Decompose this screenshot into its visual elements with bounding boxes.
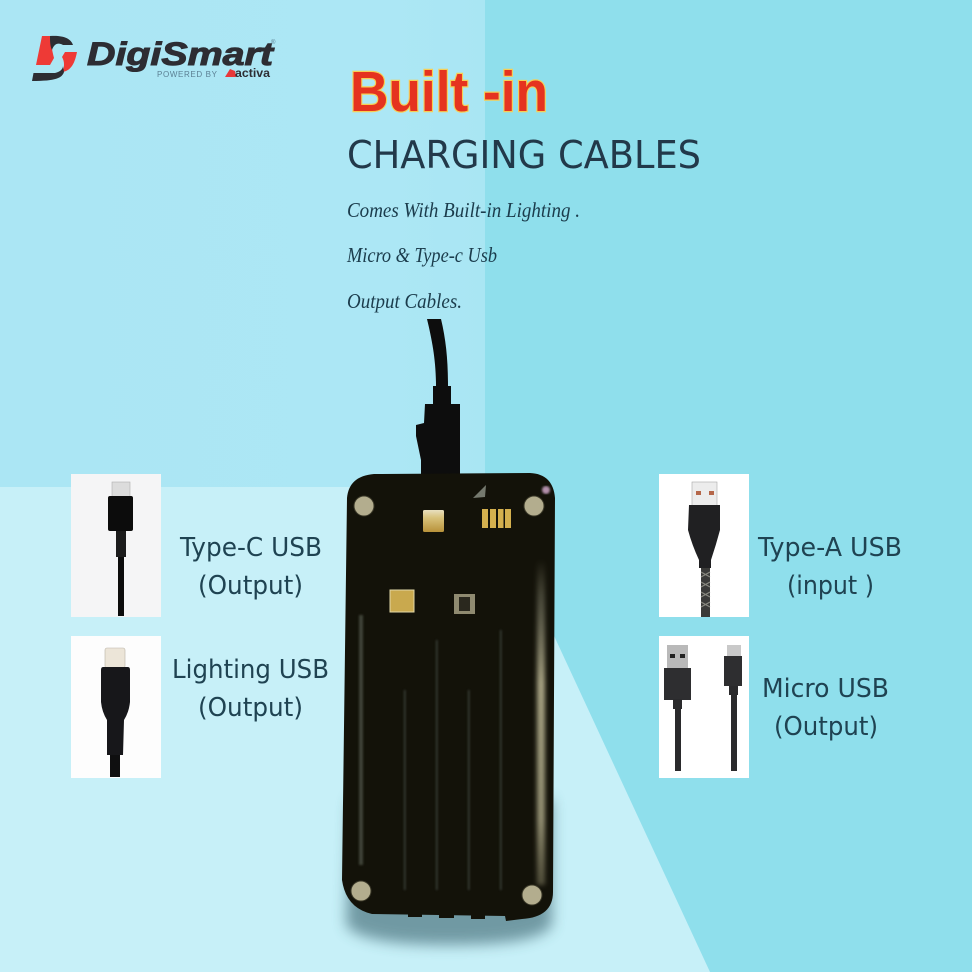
label: Type-C USB (Output)	[179, 533, 322, 601]
type-c connector	[390, 590, 414, 612]
label: Lighting USB (Output)	[172, 655, 329, 723]
activa name: activa	[235, 68, 271, 80]
registered mark: ®	[271, 39, 276, 46]
corner screws	[351, 496, 544, 905]
label: Type-A USB (input)	[757, 533, 902, 601]
input cable	[416, 319, 460, 476]
micro contact pins	[482, 509, 511, 528]
icon: DigiSmart mark	[32, 36, 77, 81]
left edge highlight	[359, 615, 363, 865]
label: Lighting USB (Output): (Output)	[198, 693, 303, 723]
tile: Type-C USB cable	[71, 474, 161, 617]
brand name: DigiSmart	[87, 36, 275, 72]
lightning connector	[423, 510, 444, 532]
tile: USB-A and Micro USB cables	[659, 636, 749, 778]
right edge highlight	[537, 560, 545, 885]
heading: Built -in: Built -in	[350, 60, 548, 124]
logo: DigiSmart	[32, 36, 276, 81]
icon: activa mark	[225, 69, 236, 77]
bottom notches	[408, 914, 485, 919]
label: Type-A USB (input): (input )	[787, 571, 874, 601]
device body	[342, 473, 555, 921]
device shadow	[346, 800, 552, 945]
power bank with built-in cable	[342, 319, 555, 945]
label: Type-A USB (input): Type-A USB	[757, 533, 902, 563]
description text: Micro & Type-c Usb	[346, 243, 497, 267]
heading: CHARGING CABLES: CHARGING CABLES	[347, 133, 701, 177]
glint	[473, 485, 486, 498]
tile: Type-A USB cable	[659, 474, 749, 617]
description text: Output Cables.	[347, 289, 462, 313]
label: Type-C USB (Output): (Output)	[198, 571, 303, 601]
label: Lighting USB (Output): Lighting USB	[172, 655, 329, 685]
micro connector	[454, 594, 475, 614]
description text: Comes With Built-in Lighting .	[347, 198, 580, 222]
description text	[346, 198, 580, 313]
powered by line: POWERED BY	[157, 70, 218, 79]
groove lines	[404, 630, 502, 890]
label: Micro USB (Output): (Output)	[774, 712, 878, 742]
tile: Lightning cable	[71, 636, 161, 778]
label: Type-C USB (Output): Type-C USB	[179, 533, 322, 563]
label: Micro USB (Output): Micro USB	[762, 674, 889, 704]
label: Micro USB (Output)	[762, 674, 889, 742]
